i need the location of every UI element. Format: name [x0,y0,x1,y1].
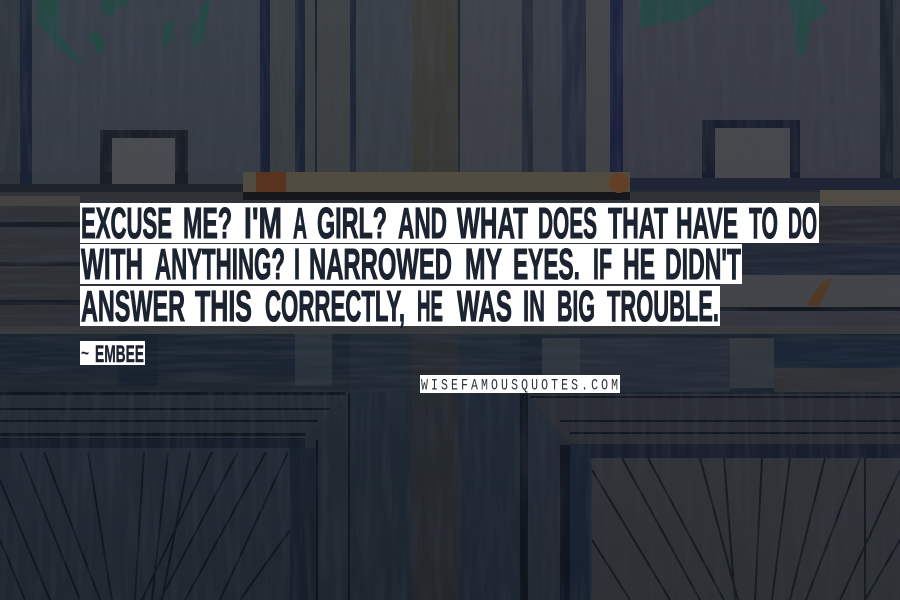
lower right frame [528,394,900,600]
quote line 1: HAVE [676,199,738,248]
quote line 2: NARROWED [309,240,452,289]
quote line 2: DIDN'T [665,240,741,289]
quote line 1: I'M [244,199,282,248]
quote line 2: WITH [81,240,143,289]
quote line 1: GIRL? [317,199,387,248]
sunburst panel left [0,448,290,600]
quote line 2 [80,240,742,289]
quote line 1: THAT [608,199,668,248]
green paint marks [38,0,828,63]
quote line 3: THIS [195,282,252,331]
author credit [80,341,145,368]
lower left frame [0,392,350,600]
quote line 3: HE [417,282,443,331]
quote line 1 [80,199,819,248]
quote line 3: ANSWER [81,282,185,331]
quote line 3: BIG [557,282,595,331]
quote line 3: CORRECTLY, [265,282,405,331]
small square insets [100,120,800,194]
quote line 1: ME? [183,199,232,248]
middle band [0,334,900,394]
sunburst panel right [592,458,900,600]
quote line 3: TROUBLE. [607,282,719,331]
quote line 1: DOES [538,199,597,248]
website watermark: WISEFAMOUSQUOTES.COM [421,377,621,395]
quote line 1: AND [398,199,447,248]
quote line 1: TO [749,199,778,248]
center vertical planks [350,334,528,600]
quote line 1: WHAT [457,199,528,248]
rusty latch bar [243,172,630,200]
author credit: EMBEE [95,341,144,368]
quote line 3: WAS [457,282,512,331]
quote line 2: ANYTHING? [155,240,285,289]
quote line 1: A [293,199,307,248]
quote text block [80,199,819,331]
left and right rail detail [0,190,900,334]
quote line 2: IF [593,240,612,289]
rails below upper panels [0,178,900,332]
quote line 2: MY [465,240,502,289]
infographic canvas: DO [788,199,817,248]
quote line 1: EXCUSE [81,199,172,248]
quote line 3: IN [523,282,545,331]
quote line 3 [80,282,720,331]
quote line 2: HE [623,240,655,289]
quote line 2: I [294,240,300,289]
quote line 2: EYES. [513,240,580,289]
upper door panels [0,0,900,196]
author credit: ~ [81,343,89,363]
